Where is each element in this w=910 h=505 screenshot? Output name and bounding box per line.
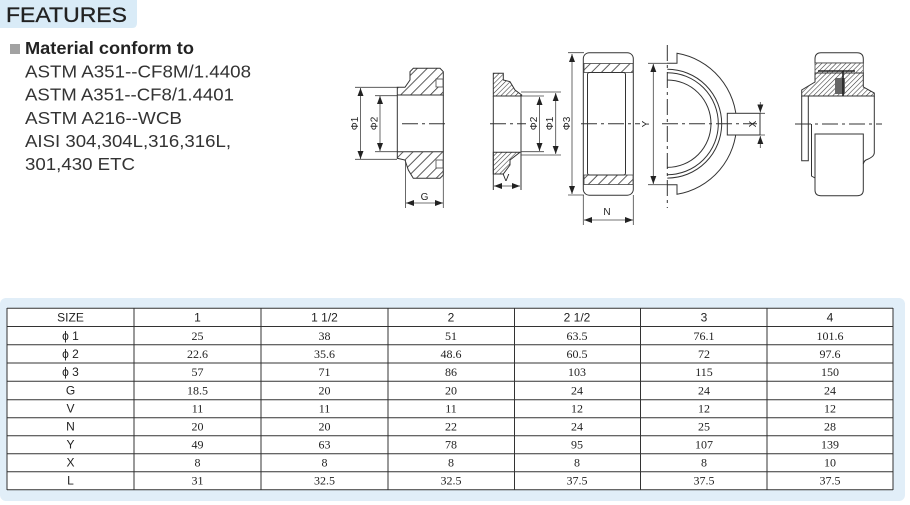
row: X: 8 (701, 456, 707, 470)
row: Y: 49 (192, 438, 204, 452)
row: V: V (66, 402, 75, 416)
row: phi 3 (62, 365, 839, 379)
row: L: 37.5 (566, 474, 588, 488)
row: phi 1: 63.5 (566, 329, 588, 343)
row: size: 4 (827, 310, 834, 324)
row: size: 2 (448, 310, 455, 324)
row: V: 11 (445, 402, 457, 416)
row: V: 12 (824, 402, 836, 416)
row: phi 1: 38 (318, 329, 330, 343)
row: X: 10 (824, 456, 836, 470)
diagram: cross section 1 (350, 68, 446, 208)
text: material standards: ASTM A351--CF8M/1.4408 (25, 62, 251, 82)
row: size (57, 310, 834, 324)
row: G: 24 (698, 384, 710, 398)
text: material standards: ASTM A216--WCB (25, 108, 182, 128)
row: Y: 95 (571, 438, 583, 452)
row: G: G (66, 384, 75, 398)
row: size: SIZE (57, 310, 84, 324)
diagram: assembled section view (795, 53, 882, 196)
row: size: 1 1/2 (311, 310, 338, 324)
diagram: cross section 1: G (421, 192, 429, 203)
row: L: 31 (192, 474, 204, 488)
row: phi 1: 25 (192, 329, 204, 343)
row: X: 8 (194, 456, 200, 470)
row: phi 2: 48.6 (440, 347, 462, 361)
diagram: cross section 2: Φ1 (545, 116, 556, 130)
row: L: 32.5 (314, 474, 335, 488)
row: phi 3: 103 (568, 365, 586, 379)
row: phi 3: 86 (445, 365, 457, 379)
row: phi 1: 76.1 (694, 329, 714, 343)
row: X: 8 (448, 456, 454, 470)
row: phi 1: ϕ 1 (62, 329, 79, 343)
row: Y: 139 (821, 438, 839, 452)
row: phi 2 (62, 347, 840, 361)
row: Y: 107 (695, 438, 713, 452)
row: phi 3: 71 (318, 365, 330, 379)
text: material conform to: Material conform to (25, 38, 194, 58)
row: V: 11 (192, 402, 203, 416)
row: phi 2: ϕ 2 (62, 347, 79, 361)
text: material standards: AISI 304,304L,316,316L, (25, 131, 231, 151)
row: N: 24 (571, 420, 583, 434)
heading: FEATURES: FEATURES (6, 3, 127, 27)
row: phi 2: 97.6 (820, 347, 840, 361)
row: X (66, 456, 836, 470)
row: size: 3 (701, 310, 708, 324)
diagram: cross section 1: Φ1 (350, 116, 361, 130)
diagram: cross section 3: N (603, 207, 611, 218)
row: phi 3: ϕ 3 (62, 365, 79, 379)
text block: material list (10, 38, 251, 174)
row: phi 2: 60.5 (566, 347, 588, 361)
row: N: 22 (445, 420, 457, 434)
row: G: 20 (318, 384, 330, 398)
row: N: 28 (824, 420, 836, 434)
diagram: cross section 3 (568, 53, 640, 225)
row: Y (66, 438, 839, 452)
row: L: 37.5 (694, 474, 714, 488)
row: N: 20 (192, 420, 204, 434)
text: material standards: ASTM A351--CF8/1.4401 (25, 84, 234, 104)
row: Y: 78 (445, 438, 457, 452)
row: phi 2: 35.6 (314, 347, 335, 361)
row: phi 3: 57 (192, 365, 204, 379)
row: N: N (66, 420, 75, 434)
row: phi 1 (62, 329, 844, 343)
diagram: cross section 1: Φ2 (370, 116, 380, 130)
diagram: cross section 2: Φ2 (529, 116, 540, 130)
row: V (66, 402, 836, 416)
row: G: 18.5 (187, 384, 208, 398)
row: phi 3: 115 (695, 365, 713, 379)
row: V: 11 (319, 402, 330, 416)
row: G (66, 384, 836, 398)
row: phi 3: 150 (821, 365, 839, 379)
row: size: 2 1/2 (564, 310, 591, 324)
row: X: 8 (322, 456, 328, 470)
row: L: 32.5 (440, 474, 462, 488)
row: G: 20 (445, 384, 457, 398)
table grid (7, 308, 893, 490)
row: Y: 63 (318, 438, 330, 452)
diagram: cross section 2: Φ3 (562, 116, 573, 130)
row: N (66, 420, 836, 434)
diagram: half-round front view: Y (641, 120, 652, 127)
diagram: cross section 2: V (503, 173, 510, 184)
row: N: 25 (698, 420, 710, 434)
diagram: cross section 2 (490, 73, 573, 190)
table background (7, 308, 893, 490)
row: size: 1 (194, 310, 201, 324)
icon: grey square bullet (10, 44, 20, 54)
text: material standards: 301,430 ETC (25, 154, 135, 174)
text: material standards (25, 62, 251, 174)
diagram: half-round front view (641, 45, 765, 208)
row: phi 1: 51 (445, 329, 457, 343)
row: phi 2: 22.6 (187, 347, 208, 361)
row: V: 12 (571, 402, 583, 416)
row: L: L (67, 474, 74, 488)
row: Y: Y (66, 438, 75, 452)
row: phi 2: 72 (698, 347, 710, 361)
row: L (67, 474, 840, 488)
row: X: X (66, 456, 75, 470)
row: N: 20 (318, 420, 330, 434)
row: phi 1: 101.6 (816, 329, 844, 343)
diagram: half-round front view: X (748, 120, 759, 127)
row: X: 8 (574, 456, 580, 470)
row: V: 12 (698, 402, 710, 416)
row: G: 24 (571, 384, 583, 398)
row: G: 24 (824, 384, 836, 398)
panel: dimensions table (0, 298, 905, 501)
row: L: 37.5 (820, 474, 840, 488)
